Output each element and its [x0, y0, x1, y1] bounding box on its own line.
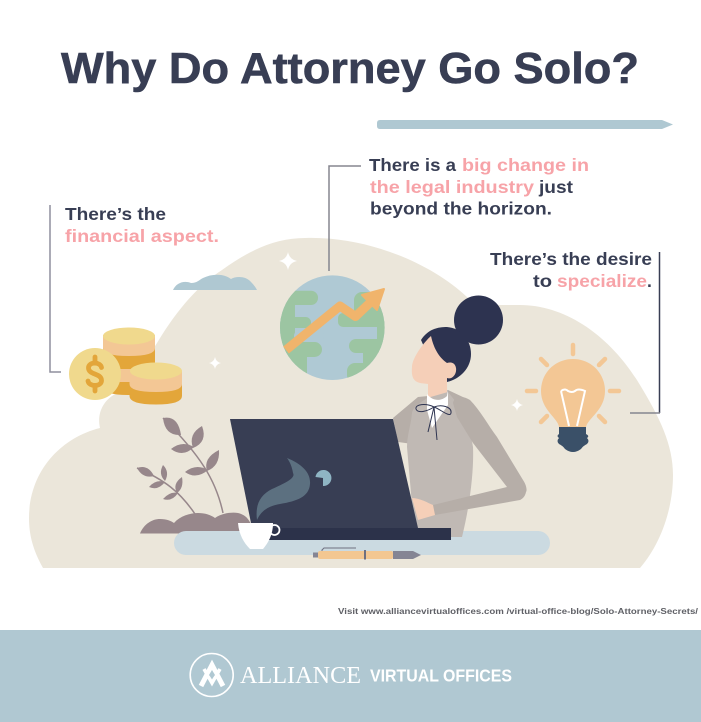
collar — [427, 390, 448, 428]
text block: big change: just — [538, 177, 573, 197]
woman — [393, 296, 527, 537]
text block: financial aspect: financial aspect. — [65, 226, 219, 246]
bow tie — [416, 405, 451, 440]
icon: cloud — [173, 275, 257, 290]
continents — [280, 290, 385, 378]
dollar coin — [69, 348, 121, 400]
laptop — [230, 419, 451, 540]
desk — [174, 531, 550, 555]
text block: big change — [369, 155, 589, 218]
text block: big change: the legal industry — [370, 177, 534, 197]
text block: financial aspect: There’s the — [65, 204, 166, 224]
logo — [190, 654, 512, 696]
rays — [527, 345, 619, 422]
text block: specialize: . — [647, 271, 652, 291]
text block: big change: beyond the horizon. — [370, 198, 552, 218]
background cloud shape — [29, 238, 673, 568]
footer band — [0, 630, 701, 722]
screen — [230, 419, 418, 528]
text block: specialize: There’s the desire — [490, 249, 652, 269]
sweater — [407, 392, 473, 537]
hair bun — [454, 296, 503, 344]
text block: specialize — [490, 249, 652, 291]
accent bar — [377, 120, 673, 129]
base — [252, 528, 451, 540]
icon: plant — [137, 418, 254, 534]
text block: big change: big change in — [462, 155, 589, 175]
logo tagline: VIRTUAL OFFICES — [370, 666, 512, 686]
title: Why Do Attorney Go Solo? — [61, 44, 639, 93]
base — [558, 427, 588, 452]
shoulders — [393, 390, 470, 445]
leaves — [163, 418, 181, 435]
icon: light bulb — [527, 345, 619, 452]
coffee cup — [238, 523, 280, 549]
right arm — [433, 397, 527, 515]
glass — [541, 359, 605, 427]
connector: financial aspect — [50, 205, 61, 372]
logo mark — [190, 654, 233, 696]
icon: sparkles — [209, 252, 523, 411]
text block: specialize: specialize — [557, 271, 647, 291]
icon: globe with growth arrow — [280, 275, 385, 380]
source link: Visit www.alliancevirtualoffices.com /virtual-office-blog/Solo-Attorney-Secrets/ — [338, 606, 699, 616]
pen — [313, 548, 421, 560]
hair — [421, 327, 471, 382]
connector: specialize — [630, 252, 660, 413]
logo wordmark: ALLIANCE — [240, 662, 361, 689]
growth arrow — [286, 298, 375, 350]
steam — [257, 458, 310, 520]
soil — [140, 513, 254, 534]
text block: specialize: to — [533, 271, 552, 291]
icon: coins — [69, 328, 182, 404]
hand — [412, 498, 436, 520]
big coin stack — [103, 328, 155, 395]
logo mark — [316, 470, 331, 486]
text block: financial aspect — [65, 204, 219, 246]
filament — [561, 390, 585, 426]
neck and face — [412, 336, 456, 399]
stems — [137, 418, 223, 514]
small coin stack — [130, 362, 182, 404]
connector: big change — [329, 166, 361, 271]
text block: big change: There is a — [369, 155, 456, 175]
